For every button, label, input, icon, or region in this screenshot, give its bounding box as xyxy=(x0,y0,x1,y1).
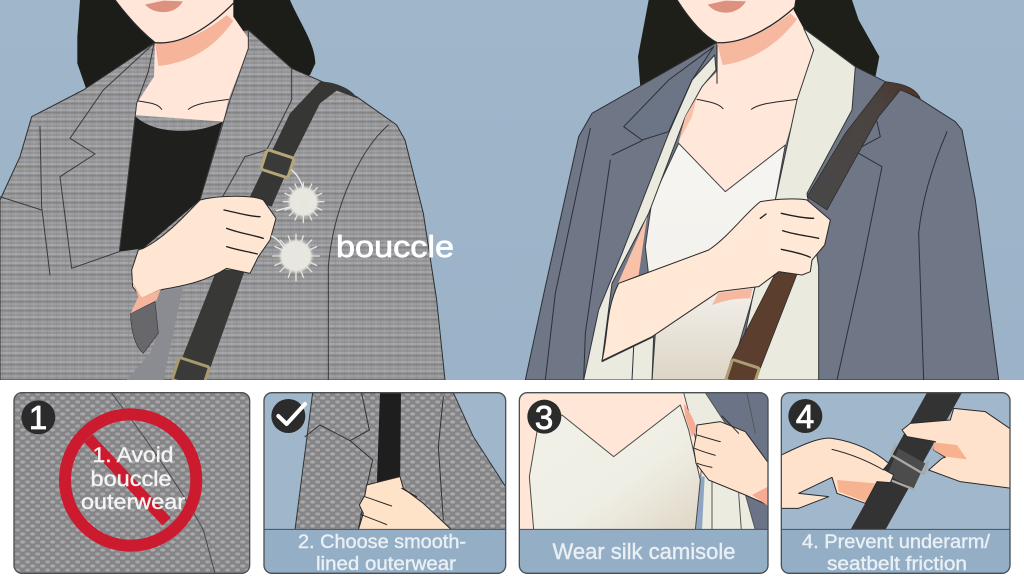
side skin xyxy=(618,217,647,283)
finger lines xyxy=(224,210,263,254)
strap highlight segment xyxy=(887,448,925,488)
lower buckle xyxy=(172,357,209,389)
panels right pair xyxy=(519,393,1012,573)
lapels xyxy=(60,43,154,268)
jacket xyxy=(705,393,768,530)
badge 4 xyxy=(788,399,822,433)
panel 1 text: outerwear xyxy=(81,491,185,514)
tweed texture xyxy=(14,393,250,573)
panel 1 text: bouccle xyxy=(90,468,172,491)
badge 3 xyxy=(527,400,561,434)
pompom one xyxy=(277,170,324,223)
panel 4 caption: seatbelt friction xyxy=(827,554,967,575)
lower strap xyxy=(730,270,799,368)
panel 2 caption xyxy=(298,532,466,575)
lips xyxy=(145,1,183,12)
panel 1 text xyxy=(81,444,185,514)
background xyxy=(0,0,1024,380)
illustration: woman in boucle jacket xyxy=(0,0,445,389)
hair xyxy=(638,0,879,87)
panel 2 caption: 2. Choose smooth- xyxy=(298,532,466,553)
panels left pair xyxy=(14,393,507,573)
caption band xyxy=(781,529,1010,573)
jacket xyxy=(295,393,507,530)
cream lining right xyxy=(735,28,855,380)
lower strap xyxy=(170,270,245,380)
jacket seams xyxy=(545,122,947,380)
label: bouccle: bouccle xyxy=(336,229,454,264)
hand xyxy=(358,477,452,530)
left hand xyxy=(781,438,894,508)
camisole xyxy=(645,143,785,380)
panel 2: smooth-lined outerwear xyxy=(264,393,507,573)
badge numeral 4: 4 xyxy=(796,398,814,435)
face and neck xyxy=(115,0,248,122)
panel 4: seatbelt friction xyxy=(781,393,1012,573)
strap xyxy=(850,393,962,530)
panel 3 caption: Wear silk camisole xyxy=(552,539,736,564)
neck and chest xyxy=(677,0,814,192)
caption band xyxy=(264,529,506,573)
prohibition sign xyxy=(65,414,196,546)
panel 1 text: 1. Avoid xyxy=(92,444,174,467)
check badge xyxy=(271,399,305,433)
upper strap xyxy=(807,82,920,210)
strap buckle xyxy=(726,359,759,389)
upper strap xyxy=(248,82,357,207)
collarbone lines xyxy=(697,99,797,109)
black top xyxy=(119,115,223,252)
cream lining left xyxy=(584,55,716,380)
hair xyxy=(77,0,315,88)
caption band xyxy=(519,529,768,573)
hand xyxy=(694,422,769,505)
jacket xyxy=(525,28,999,380)
illustration: woman in smooth jacket xyxy=(525,0,999,389)
strap buckle xyxy=(261,150,294,178)
white footer band xyxy=(0,380,1024,577)
finger lines xyxy=(760,213,819,257)
forearm and hand xyxy=(602,199,830,361)
right hand xyxy=(902,408,1012,488)
panel 1: avoid boucle xyxy=(14,393,250,573)
panel 2 caption: lined outerwear xyxy=(316,554,457,575)
skin flush xyxy=(684,403,697,437)
panel 3: silk camisole xyxy=(519,393,769,573)
jacket seams xyxy=(0,125,388,380)
left lapel xyxy=(624,47,714,140)
collarbone lines xyxy=(138,99,228,109)
camisole xyxy=(529,405,700,530)
buckle xyxy=(891,445,928,489)
strap xyxy=(377,393,401,490)
panel 4 caption xyxy=(802,532,991,575)
pocket xyxy=(131,302,158,353)
jacket xyxy=(0,30,445,380)
badge 1 xyxy=(21,400,55,434)
lips xyxy=(708,1,746,13)
pompom two xyxy=(272,234,319,281)
badge numeral 1: 1 xyxy=(29,399,47,436)
forearm and hand xyxy=(132,196,276,298)
badge numeral 3: 3 xyxy=(535,399,553,436)
inner grey shirt xyxy=(127,288,183,380)
panel 4 caption: 4. Prevent underarm/ xyxy=(802,532,991,553)
cream scarf xyxy=(684,393,755,530)
